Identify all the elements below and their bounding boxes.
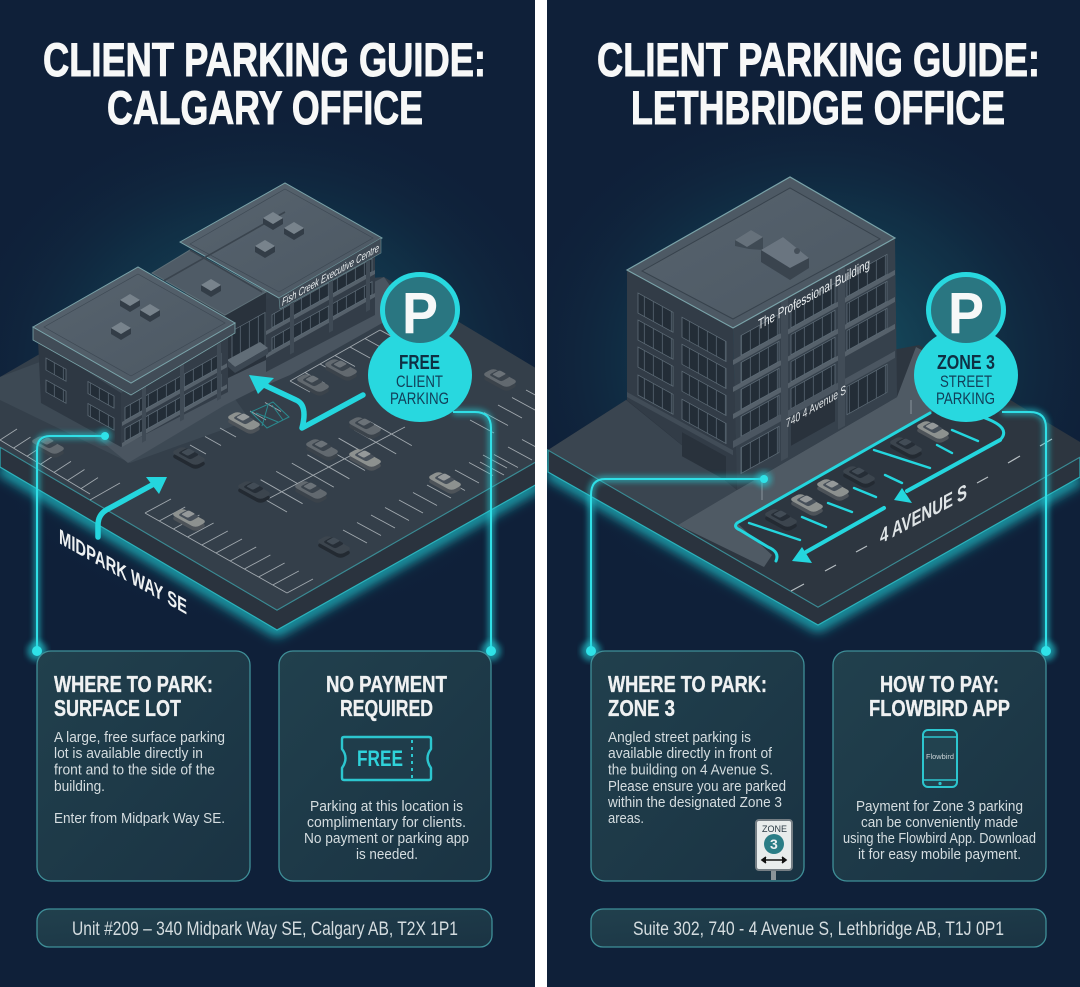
card: where to park surface lot: Enter from Midpark Way SE. [54,810,225,827]
icon: phone: Flowbird [926,752,954,761]
card: where to park surface lot: front and to the side of the [54,762,215,778]
card: no payment required: No payment or parking app [304,830,469,847]
icon: zone 3 sign [756,820,792,880]
icon: zone 3 sign: 3 [770,836,778,852]
badge: zone 3 street parking: PARKING [936,389,995,408]
roof linking seam [162,212,286,292]
arrow: to building entrance [249,375,363,428]
badge: free client parking: P [402,281,438,346]
teal zone outline [736,413,1004,561]
card: no payment required: is needed. [356,846,418,863]
card: where to park surface lot: A large, free surface parking [54,729,225,746]
rooftop units [111,212,304,340]
back wing roof [180,183,382,298]
card: how to pay flowbird: HOW TO PAY: [880,671,999,697]
arrow: traffic direction upper [894,440,1000,503]
card: where to park zone 3: available directly in front of [608,745,773,762]
arrow: entry from Midpark Way [98,477,167,537]
card: where to park zone 3: the building on 4 Avenue S. [608,762,773,778]
building: The Professional Building [627,177,897,490]
parked cars [30,358,518,559]
road centre dashes [791,439,1052,591]
title: Lethbridge [598,42,1037,125]
parking stall lines [0,330,560,593]
left wing walls [38,340,121,447]
connector: building to where to park card [581,471,772,661]
card: how to pay flowbird: can be conveniently made [861,814,1018,831]
connector: badge to payment card [453,412,501,661]
background glow behind Lethbridge building [598,171,1032,412]
badge: free client parking: PARKING [390,389,449,408]
icon: phone [923,730,957,787]
building sign: The Professional Building [758,256,870,334]
card: how to pay flowbird [833,651,1046,881]
badge: free client parking: CLIENT [396,372,443,391]
connector: building to where to park card [27,429,112,661]
entrance canopy [227,342,268,367]
card: where to park zone 3: within the designated Zone 3 [607,794,782,811]
badge: zone 3 street parking: P [948,281,984,346]
parked cars [763,420,951,532]
card: no payment required: Parking at this location is [310,798,463,815]
card: how to pay flowbird: it for easy mobile payment. [858,846,1021,863]
card: no payment required [279,651,491,881]
card: where to park surface lot [37,651,250,881]
card: where to park surface lot: lot is available directly in [54,745,203,762]
right face windows [733,238,895,488]
panel: Lethbridge office [505,0,1080,987]
illustration: Lethbridge street [548,345,1080,626]
badge: zone 3 street parking: STREET [940,372,992,391]
connector: badge to payment card [1002,412,1056,661]
left wing roof [33,323,235,395]
card: how to pay flowbird: FLOWBIRD APP [869,695,1010,721]
roof [627,177,895,328]
card: no payment required: NO PAYMENT [326,671,448,697]
building address: 740 4 Avenue S [786,382,846,431]
card: no payment required: REQUIRED [340,695,433,721]
card: where to park surface lot: WHERE TO PARK: [54,671,213,697]
back wing walls [266,256,375,372]
badge: free client parking [368,274,472,422]
address bar: Calgary: Unit #209 – 340 Midpark Way SE, Calgary AB, T2X 1P1 [72,918,458,940]
parking meter [762,400,911,500]
title: Calgary [44,42,483,125]
address bar: Calgary [37,909,492,947]
card: where to park zone 3: Angled street parking is [608,729,751,746]
card: where to park surface lot: building. [54,778,105,795]
building: Fish Creek Executive Centre [33,183,382,454]
card: where to park zone 3: areas. [608,810,644,827]
background glow behind Calgary building [50,181,486,338]
title: Calgary: CALGARY OFFICE [107,81,423,134]
middle roof [152,250,266,315]
middle wing walls [225,292,266,378]
street label: 4 Avenue S: 4 AVENUE S [880,479,967,549]
card: how to pay flowbird: using the Flowbird App. Download [843,830,1036,847]
rooftop units [735,230,809,280]
arrow: traffic direction lower [792,508,884,563]
building sign: Fish Creek Executive Centre [282,241,379,309]
left face windows [627,287,733,484]
card: where to park zone 3: WHERE TO PARK: [608,671,767,697]
badge: zone 3 street parking [914,274,1018,422]
icon: free ticket [342,737,431,780]
card: where to park surface lot: SURFACE LOT [54,695,181,721]
icon: free ticket: FREE [357,746,403,771]
card: where to park zone 3: Please ensure you are parked [608,778,786,795]
badge: free client parking: FREE [399,352,440,374]
label: Midpark Way SE: MIDPARK WAY SE [59,524,187,619]
illustration: Calgary parking lot [0,277,560,631]
teal stall lines [749,430,978,540]
card: no payment required: complimentary for clients. [307,814,466,831]
card: where to park zone 3 [591,651,804,881]
accessible parking bay [251,402,289,428]
panel: Calgary office [0,0,585,987]
card: where to park zone 3: ZONE 3 [608,695,675,721]
badge: zone 3 street parking: ZONE 3 [937,352,995,374]
icon: zone 3 sign: ZONE [762,824,787,835]
title: Calgary: CLIENT PARKING GUIDE: [43,33,486,86]
card: how to pay flowbird: Payment for Zone 3 parking [856,798,1023,815]
address bar: Lethbridge: Suite 302, 740 - 4 Avenue S, Lethbridge AB, T1J 0P1 [633,918,1004,940]
address bar: Lethbridge [591,909,1046,947]
